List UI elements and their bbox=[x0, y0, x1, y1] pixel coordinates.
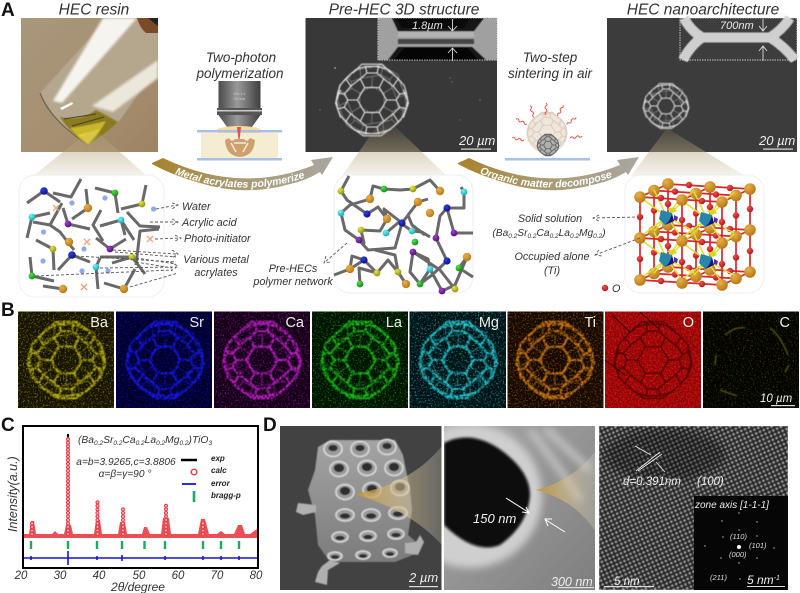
dashed leader: occupied alone bbox=[595, 238, 640, 256]
SEM: HEC nanoarchitecture bbox=[607, 18, 797, 152]
chemical formula: 3 bbox=[208, 440, 212, 447]
chemical formula: 0.2 bbox=[113, 440, 123, 447]
arrow: metal acrylates polymerize: Metal acrylates polymerize bbox=[175, 168, 304, 190]
Ti octahedra bbox=[640, 190, 734, 281]
dots: water bbox=[40, 195, 156, 274]
chemical formula: La bbox=[145, 435, 156, 446]
panel: polymer network bbox=[334, 175, 473, 294]
inset: diffraction pattern: (211) bbox=[710, 573, 727, 582]
x-axis tick labels: 60 bbox=[172, 570, 185, 582]
labels: resin contents: Photo-initiator bbox=[184, 233, 251, 245]
legend: oxygen bbox=[602, 283, 621, 295]
label: occupied alone: (Ti) bbox=[544, 265, 560, 277]
labels: resin contents: Various metal bbox=[183, 254, 249, 266]
panel letter B: B bbox=[1, 300, 15, 321]
scale bar: 300 nm: 300 nm bbox=[551, 575, 593, 589]
map: La: La bbox=[386, 315, 403, 331]
chemical formula: 0.2 bbox=[94, 440, 103, 447]
lattice bonds bbox=[640, 184, 750, 285]
chemical formula: 0.2 bbox=[136, 440, 145, 447]
chemical formula: (Ba bbox=[78, 435, 94, 446]
chemical formula: Ca bbox=[122, 435, 136, 446]
icon: two-photon objective: 60x 1.4 bbox=[234, 92, 245, 96]
label: formula: La bbox=[559, 228, 570, 239]
d-spacing marks bbox=[635, 446, 665, 472]
map: C: C bbox=[780, 315, 790, 331]
inset: diffraction pattern: (000) bbox=[729, 550, 747, 559]
photo: vial of HEC resin bbox=[21, 18, 158, 152]
label: occupied alone: Occupied alone bbox=[514, 251, 590, 263]
back-layer atoms bbox=[648, 178, 756, 284]
legend: bragg-p bbox=[211, 491, 241, 500]
network balls bbox=[338, 186, 471, 294]
scale bar: 2 µm: 2 µm bbox=[408, 570, 438, 585]
bragg ticks bbox=[31, 541, 239, 549]
label: two-photon polymerization: polymerization bbox=[195, 66, 284, 81]
scale bar: 5 nm bbox=[604, 576, 654, 588]
map: Sr bbox=[113, 309, 217, 411]
legend: exp bbox=[211, 454, 225, 463]
fullerene pre-HEC bbox=[324, 52, 420, 148]
thickness arrows bbox=[506, 498, 565, 532]
label: plane: (100) bbox=[697, 476, 724, 488]
map: Ba: Ba bbox=[90, 315, 109, 331]
map: Ba bbox=[15, 309, 118, 411]
sticks bbox=[27, 179, 160, 289]
map: Mg bbox=[406, 309, 510, 411]
panel letter A: A bbox=[1, 0, 15, 21]
tube holes bbox=[328, 443, 405, 559]
scale bar: 2 µm bbox=[408, 573, 438, 588]
map: Ti: Ti bbox=[584, 315, 596, 331]
SEM: lattice structure bbox=[280, 426, 442, 590]
x-axis tick labels: 80 bbox=[250, 570, 263, 582]
panel letter D: D bbox=[263, 415, 277, 436]
map: O bbox=[605, 312, 701, 408]
map: Ti bbox=[503, 309, 607, 411]
map: O: O bbox=[683, 315, 694, 331]
label: two-photon polymerization: Two-photon bbox=[206, 50, 276, 65]
map: Ca: Ca bbox=[285, 315, 305, 331]
measured line bbox=[67, 434, 69, 535]
label: solid solution: Solid solution bbox=[518, 213, 582, 225]
legend bbox=[181, 454, 241, 502]
labels: resin contents bbox=[181, 201, 251, 279]
scale bar: 20 µm: 20 µm bbox=[458, 133, 496, 148]
label: formula: (Ba bbox=[492, 228, 508, 239]
network chains bbox=[334, 176, 473, 291]
TEM: lattice image bbox=[599, 426, 788, 590]
label: formula: 0.2 bbox=[570, 233, 579, 240]
label: Pre-HECs polymer network: Pre-HECs bbox=[269, 263, 318, 275]
legend: error bbox=[211, 479, 231, 488]
title: HEC resin: HEC resin bbox=[59, 2, 129, 18]
label: formula: 0.2 bbox=[550, 233, 559, 240]
inset: diffraction pattern: (101) bbox=[749, 541, 767, 550]
calculated curve base bbox=[24, 518, 257, 538]
map: La bbox=[308, 309, 412, 411]
map: Mg: Mg bbox=[479, 315, 499, 331]
scale bar: 5 nm: 5 nm bbox=[614, 576, 640, 588]
inset: diffraction pattern: zone axis [1-1-1] bbox=[694, 500, 769, 511]
labels: resin contents: Water bbox=[182, 201, 211, 213]
calculated peaks bbox=[32, 436, 203, 534]
label: formula: Ca bbox=[537, 228, 550, 239]
panel letter C: C bbox=[1, 415, 15, 436]
chemical formula: 0.2 bbox=[156, 440, 166, 447]
panel D: microscopy bbox=[263, 415, 788, 590]
inset: diffraction pattern: 5 nm bbox=[747, 573, 774, 587]
tube rims bbox=[324, 440, 409, 560]
x-axis tick labels: 50 bbox=[133, 570, 146, 582]
chemical formula: )TiO bbox=[188, 435, 208, 446]
label: formula: 0.2 bbox=[508, 233, 518, 240]
scale bar: 20 µm: 20 µm bbox=[758, 133, 796, 148]
legend: oxygen: O bbox=[612, 283, 621, 295]
labels: resin contents: acrylates bbox=[194, 267, 238, 279]
SEM: hole closeup bbox=[444, 426, 595, 590]
label: Pre-HECs polymer network: polymer network bbox=[252, 276, 333, 288]
icon: two-photon objective: Oil lens bbox=[234, 97, 246, 101]
marks: photo-initiator bbox=[53, 205, 153, 290]
label: d-spacing: d=0.391nm bbox=[623, 476, 681, 488]
icon: two-step sintering bbox=[505, 103, 590, 160]
chemical formula: Sr bbox=[103, 435, 114, 446]
panel: crystal structure bbox=[625, 175, 764, 293]
label: two-step sintering in air: Two-step bbox=[523, 50, 578, 65]
lattice body bbox=[308, 440, 420, 562]
y-axis label: Intensity(a.u.) bbox=[6, 456, 20, 532]
x-axis tick labels: 70 bbox=[211, 570, 224, 582]
label: formula: 0.2 bbox=[593, 233, 603, 240]
label: two-step sintering in air: sintering in air bbox=[508, 66, 593, 81]
chemical formula: 0.2 bbox=[179, 440, 189, 447]
metal acrylate balls bbox=[29, 187, 145, 293]
legend: calc bbox=[211, 466, 227, 475]
label: formula: Sr bbox=[517, 228, 528, 239]
arrow: metal acrylates polymerize bbox=[152, 157, 333, 190]
label: formula: ) bbox=[601, 228, 606, 239]
zoom wedge: pre-HEC bbox=[342, 116, 447, 176]
inset: 1.8 µm strut: 1.8µm bbox=[412, 20, 443, 32]
arrow: organic matter decompose: Organic matter decompose bbox=[480, 168, 612, 188]
chemical formula: Mg bbox=[165, 435, 180, 446]
dashed leader: solid solution bbox=[593, 215, 640, 221]
map: Sr: Sr bbox=[190, 315, 204, 331]
plot frame bbox=[23, 426, 258, 568]
panel C: XRD chart bbox=[1, 415, 263, 593]
lattice parameters: a=b=3.9265,c=3.8806 bbox=[76, 457, 176, 468]
panel A: synthesis workflow bbox=[1, 0, 799, 298]
panel: resin molecules bbox=[19, 175, 164, 297]
map: Ca bbox=[210, 309, 314, 411]
dashed leader: polymer network bbox=[324, 243, 347, 263]
front-layer atoms bbox=[634, 191, 728, 291]
inset: diffraction pattern: -1 bbox=[774, 575, 780, 582]
fullerene HEC bbox=[635, 76, 697, 136]
label: formula: 0.2 bbox=[527, 233, 537, 240]
x-axis tick labels: 30 bbox=[54, 570, 67, 582]
x-axis tick labels bbox=[14, 570, 263, 582]
lattice parameters: α=β=γ=90 ° bbox=[99, 469, 151, 480]
icon: two-photon objective bbox=[197, 81, 282, 160]
labels: resin contents: Acrylic acid bbox=[181, 217, 238, 229]
x-axis tick labels: 20 bbox=[14, 570, 28, 582]
zoom fan bbox=[536, 450, 596, 532]
title: Pre-HEC 3D structure: Pre-HEC 3D structure bbox=[329, 2, 480, 18]
inset: 700 nm strut bbox=[680, 18, 797, 61]
inset: diffraction pattern: (110) bbox=[730, 532, 747, 541]
SEM: Pre-HEC 3D structure bbox=[306, 18, 497, 152]
scale bar: 10 µm: 10 µm bbox=[760, 393, 793, 405]
inset: 700 nm strut: 700nm bbox=[720, 20, 754, 32]
label: 150 nm: 150 nm bbox=[473, 511, 517, 526]
title: HEC nanoarchitecture: HEC nanoarchitecture bbox=[627, 2, 780, 18]
label: formula: Mg bbox=[579, 228, 593, 239]
inset: diffraction pattern bbox=[694, 496, 788, 590]
map: C bbox=[703, 312, 799, 408]
dashed leaders: resin bbox=[36, 203, 181, 287]
zoom fan bbox=[354, 446, 442, 545]
zoom wedge: resin bbox=[33, 128, 147, 176]
difference curve bbox=[24, 551, 257, 565]
x-axis tick labels: 40 bbox=[93, 570, 106, 582]
inset: 1.8 µm strut bbox=[378, 18, 497, 61]
arrow: organic matter decompose bbox=[458, 157, 639, 190]
panel B: EDS maps bbox=[1, 300, 799, 411]
zoom wedge: HEC bbox=[631, 128, 745, 176]
